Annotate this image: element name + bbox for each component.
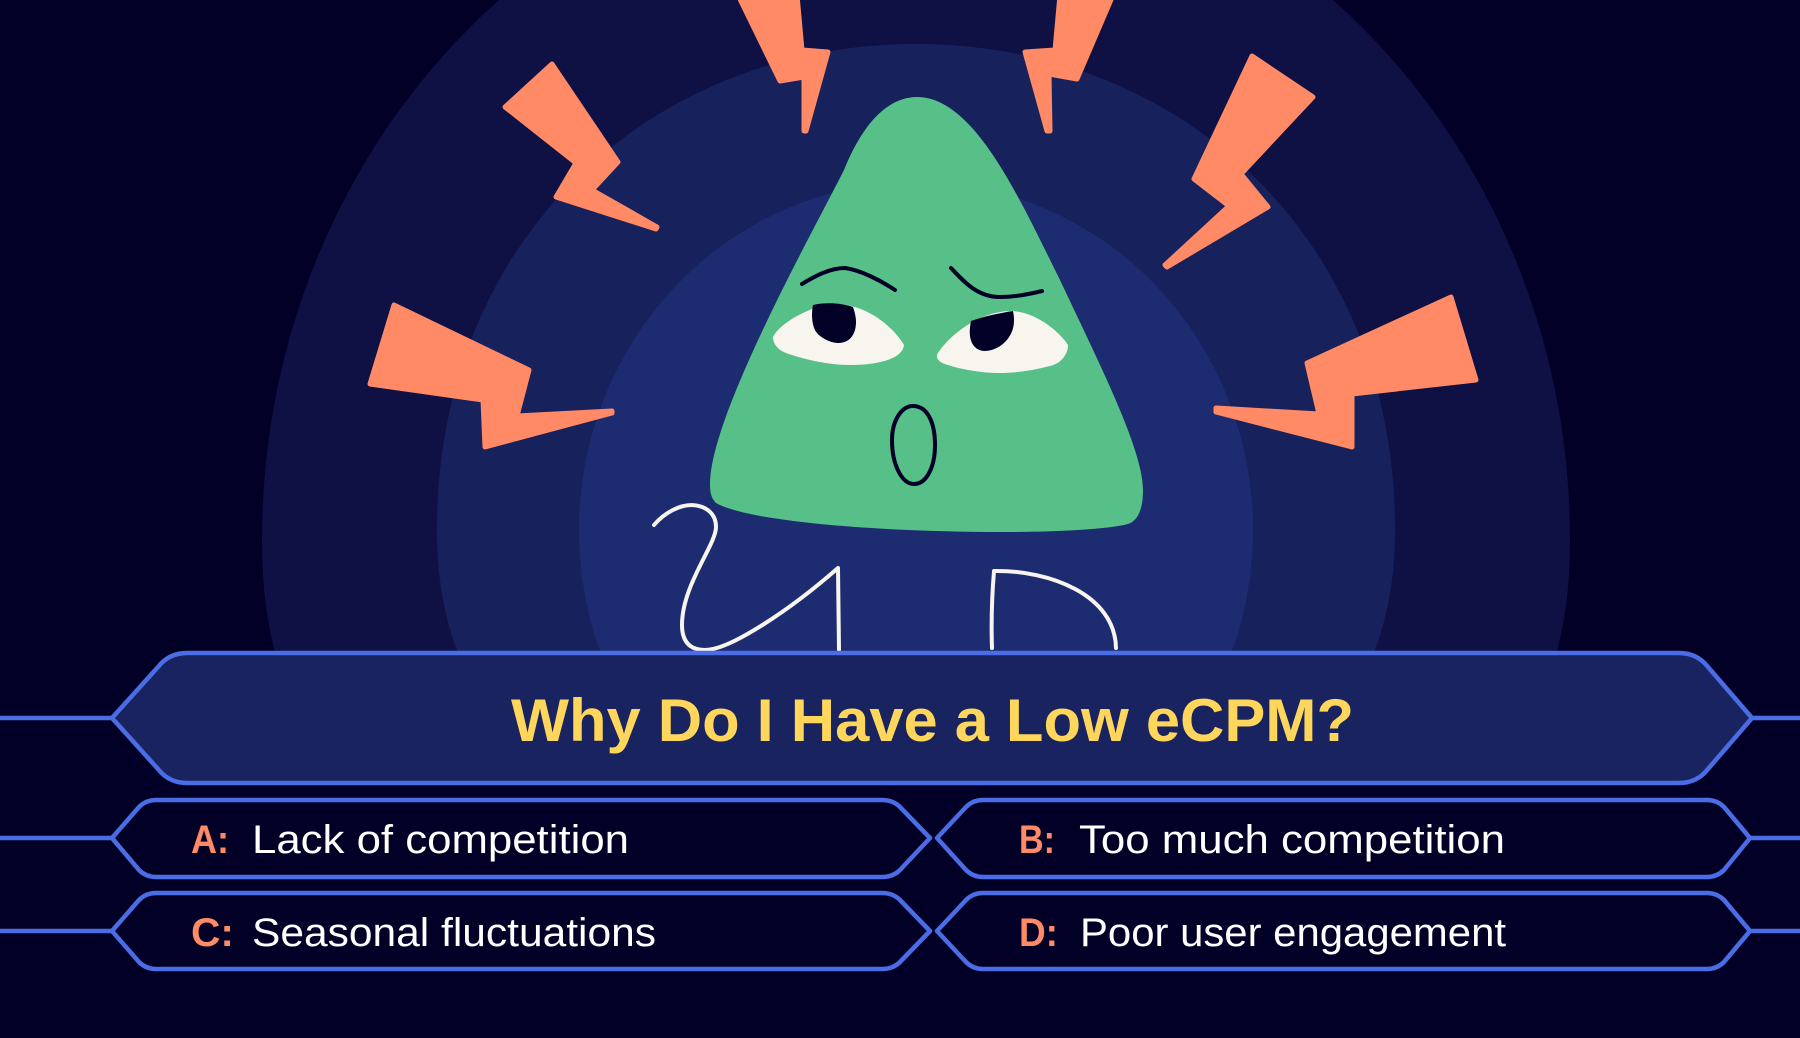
icon: lightning bolt upper left (505, 64, 657, 229)
answer connector lines (0, 838, 1800, 931)
mouth (892, 406, 935, 484)
question connector lines (0, 716, 1800, 720)
answer B letter: B: (1019, 818, 1055, 862)
background concentric arcs (262, 0, 1570, 651)
character: green triangle (654, 97, 1143, 650)
right eye white (937, 311, 1068, 373)
answer B text: Too much competition (1079, 818, 1505, 862)
answer C letter: C: (191, 911, 234, 955)
panel: answer A (112, 800, 930, 877)
icon: lightning bolt upper right (1165, 56, 1313, 267)
panel: answer C (112, 893, 930, 969)
left eyebrow (802, 268, 895, 290)
icon: lightning bolt lower left (370, 305, 612, 447)
character body (710, 97, 1143, 532)
icon: lightning bolt top centre left (738, 0, 828, 131)
answer A letter: A: (191, 818, 229, 862)
answer D text: Poor user engagement (1080, 911, 1506, 955)
right pupil (970, 311, 1014, 351)
icon: lightning bolt lower right (1216, 297, 1476, 447)
left leg (654, 505, 839, 650)
answer A text: Lack of competition (252, 818, 629, 862)
left eye white (773, 304, 904, 365)
answer C text: Seasonal fluctuations (252, 911, 656, 955)
question heading: Why Do I Have a Low eCPM? (511, 687, 1354, 754)
icon: lightning bolt top centre right (1025, 0, 1113, 131)
left pupil (812, 303, 856, 343)
answer D letter: D: (1019, 911, 1058, 955)
right leg (992, 571, 1116, 648)
right eyebrow (951, 268, 1042, 297)
panel: answer B (937, 800, 1750, 877)
panel: answer D (937, 893, 1750, 969)
panel: question (112, 653, 1752, 783)
